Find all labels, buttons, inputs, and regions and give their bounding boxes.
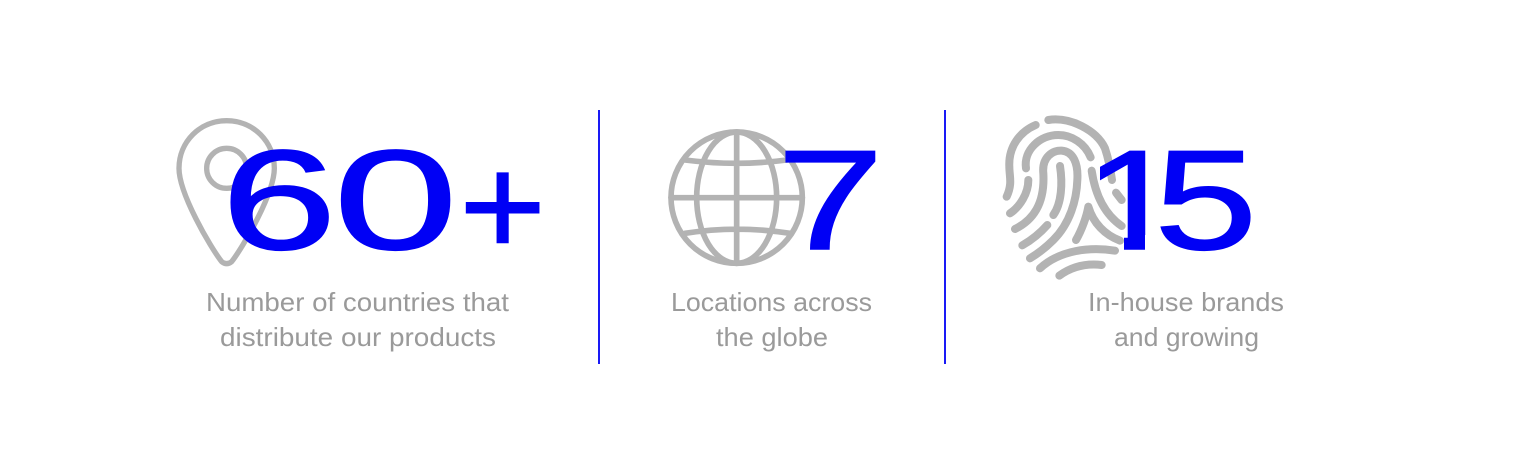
icon: map pin [179, 121, 274, 264]
stat: 60+: + [459, 126, 546, 285]
divider right [944, 110, 946, 364]
icon: fingerprint [1007, 119, 1122, 276]
text: locations caption: Locations across [671, 287, 872, 317]
stat: 15: 5 [1154, 121, 1257, 280]
icon: globe [671, 132, 802, 263]
stat: 15 [1100, 150, 1251, 252]
text: countries caption: Number of countries that [206, 287, 510, 317]
stat: 60+: 0 [333, 120, 458, 279]
text: locations caption [671, 287, 872, 352]
stat: 60+: 6 [221, 120, 337, 279]
text: brands caption [1088, 287, 1284, 352]
text: locations caption: the globe [716, 322, 828, 352]
stat: 15: 1 [1084, 121, 1183, 280]
text: countries caption [206, 287, 510, 352]
panel: countries [179, 120, 546, 352]
panel: locations [671, 120, 884, 352]
divider left [598, 110, 600, 364]
stat: 60+ [221, 120, 546, 285]
text: countries caption: distribute our products [220, 322, 496, 352]
stat: 7: 7 [776, 120, 884, 279]
text: brands caption: In-house brands [1088, 287, 1284, 317]
panel: brands [1007, 119, 1284, 352]
text: brands caption: and growing [1114, 322, 1259, 352]
